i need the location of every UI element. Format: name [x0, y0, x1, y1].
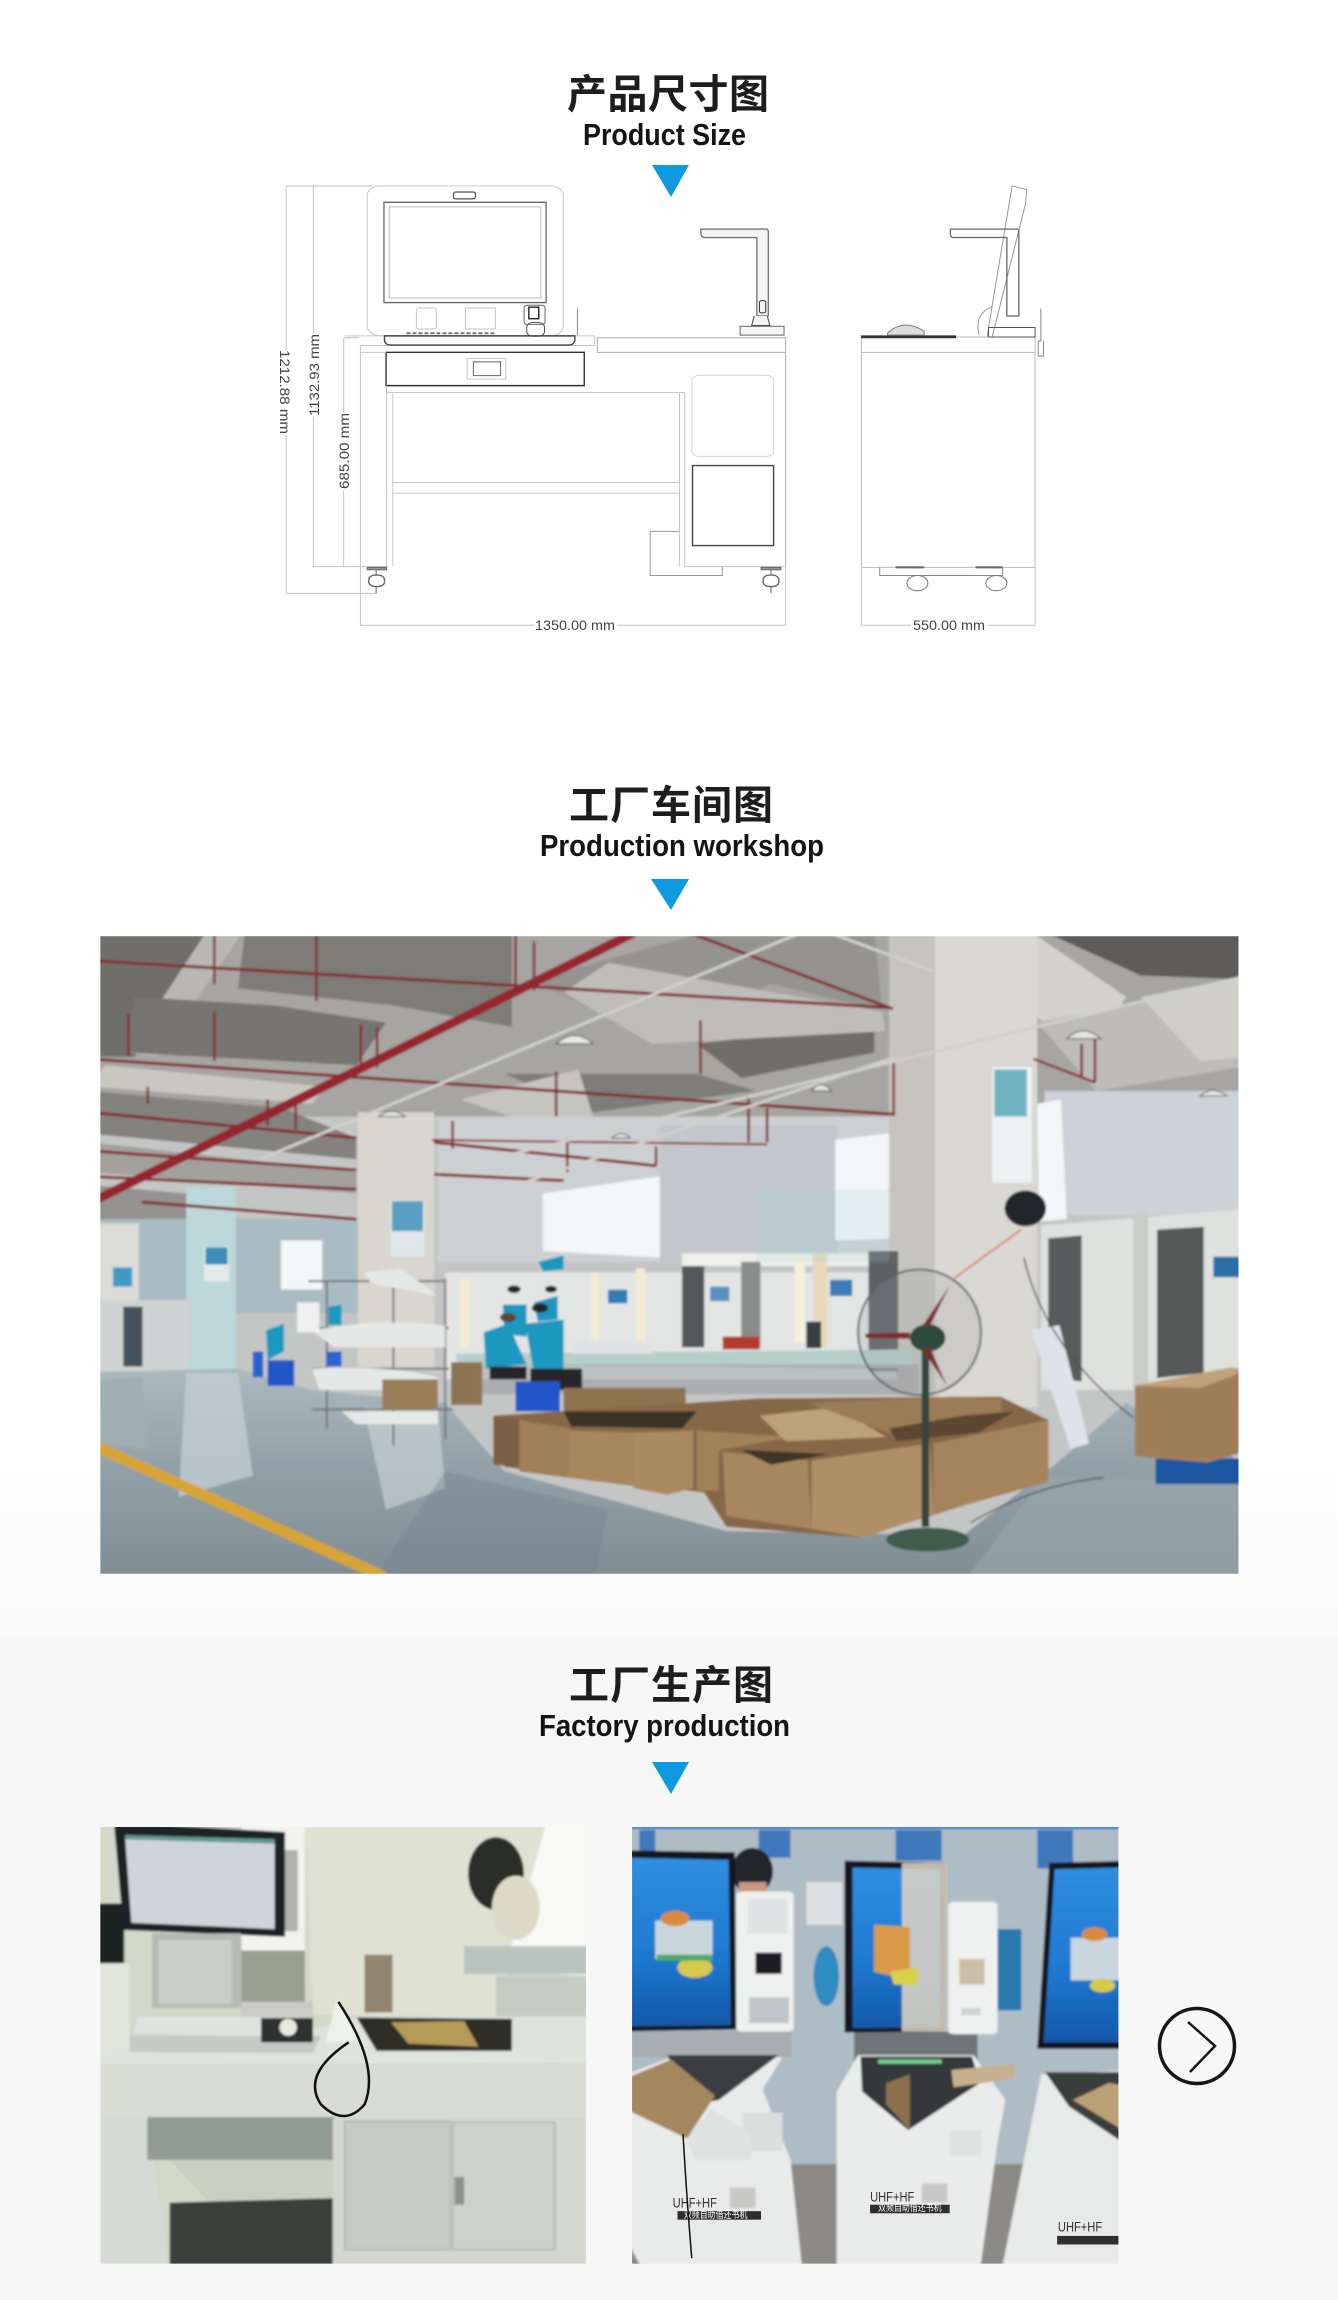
middle kiosk: [845, 1861, 997, 2066]
heading: production workshop: [540, 784, 824, 910]
workbench tables: [456, 1322, 919, 1394]
monitor stand: [152, 1933, 241, 2008]
section background: factory production: [0, 1638, 1338, 2300]
dimension label: 1350.00 mm: 1350.00 mm: [535, 617, 615, 633]
top blue edge: [615, 1818, 1133, 1829]
desk leg and under-desk: [90, 2117, 334, 2271]
standing fan: [858, 1270, 981, 1552]
faint watermark: [756, 1189, 889, 1262]
cabinets row: [90, 1251, 898, 1379]
front and side view line drawing: [286, 186, 1043, 626]
monitor: [114, 1822, 298, 1937]
keyboard and mouse pad: [130, 2002, 321, 2053]
kiosk labels: UHF+HF: [870, 2190, 915, 2205]
title: product size English: Product Size: [583, 117, 746, 152]
red pipes: [90, 933, 1095, 1219]
dimension label: 685.00 mm: 685.00 mm: [336, 413, 352, 489]
title: workshop English: Production workshop: [540, 828, 824, 863]
right cabinets: [1041, 1208, 1252, 1392]
wall background: [90, 1818, 599, 2271]
icon: blue down triangle: [652, 165, 689, 197]
back wall: [90, 1091, 1252, 1313]
kiosk labels: UHF+HF: [1058, 2220, 1102, 2235]
dimension label: 1132.93 mm: 1132.93 mm: [306, 334, 322, 416]
black display board with gold text: [357, 2018, 512, 2051]
column posters: [113, 1066, 1033, 1287]
white cable channel: [326, 2001, 358, 2042]
dimension lines: [286, 186, 1035, 626]
right kiosk: [1001, 1861, 1133, 2271]
front view: document camera: [701, 229, 784, 335]
left kiosk base: [615, 2055, 802, 2271]
ceiling panels: [90, 929, 1252, 1219]
product dimension drawing: [277, 186, 1043, 633]
front view: desk body: [345, 333, 786, 575]
photo: production workshop: [90, 929, 1252, 1582]
title: factory production Chinese: 工厂生产图: [569, 1664, 773, 1708]
middle kiosk base: [837, 2055, 1015, 2271]
front view: casters: [367, 567, 781, 593]
ceiling lights: [379, 1031, 1227, 1138]
kiosk label bars: [677, 2205, 1133, 2244]
floor cables: [971, 1258, 1133, 1522]
photo: desk terminal in factory: [90, 1818, 599, 2271]
title: product size Chinese: 产品尺寸图: [567, 73, 769, 117]
floor reflections: [90, 1373, 1252, 1582]
kiosk labels: [673, 2190, 1102, 2235]
wall-mounted hose reel: [1005, 1190, 1046, 1226]
left kiosk: [615, 1850, 794, 2057]
right box on blue pallet: [1135, 1368, 1252, 1484]
wire shelving trolley: [308, 1279, 453, 1446]
photo: self-service kiosks in factory: [615, 1818, 1133, 2271]
yellow floor line: [100, 1442, 388, 1574]
heading: factory production: [539, 1664, 790, 1794]
kiosk labels: 双频自助借还书机: [878, 2201, 942, 2213]
workshop wall base: [100, 1116, 1238, 1535]
icon: blue down triangle: [652, 1762, 689, 1794]
hanging cable coil: [468, 1837, 524, 1910]
desk top: [130, 2016, 586, 2064]
icon: blue down triangle: [651, 879, 689, 910]
workers in blue uniforms: [253, 1255, 582, 1411]
columns: [90, 929, 1037, 1407]
person behind kiosk: [732, 1848, 1021, 2010]
dimension label: 1212.88 mm: 1212.88 mm: [277, 350, 293, 434]
wall door and bright window: [90, 1818, 599, 2064]
room background: [615, 1818, 1133, 2271]
floor: [90, 1369, 1252, 1582]
kiosk labels: 双频自助借还书机: [684, 2208, 748, 2220]
metal cabinet: [332, 2118, 556, 2264]
dimension label: 550.00 mm: 550.00 mm: [913, 617, 985, 633]
heading: product size: [567, 73, 769, 197]
floor: [615, 2164, 1133, 2271]
air hose: [954, 1230, 1021, 1278]
icon: next arrow button: [1160, 2008, 1234, 2084]
title: workshop Chinese: 工厂车间图: [569, 784, 773, 828]
black charging cable: [683, 2134, 692, 2258]
desk front: [90, 2064, 599, 2118]
cardboard boxes: [382, 1362, 1048, 1537]
title: factory production English: Factory production: [539, 1708, 790, 1743]
leaning white panel: [1031, 1325, 1089, 1449]
black looped cable: [315, 2002, 369, 2116]
kiosk labels: UHF+HF: [673, 2196, 717, 2211]
side view: [861, 186, 1043, 591]
silver conduit: [261, 936, 1238, 1182]
wall posters: [639, 1830, 1073, 1868]
front view: monitor housing: [367, 186, 577, 336]
windows: [281, 1099, 1067, 1290]
